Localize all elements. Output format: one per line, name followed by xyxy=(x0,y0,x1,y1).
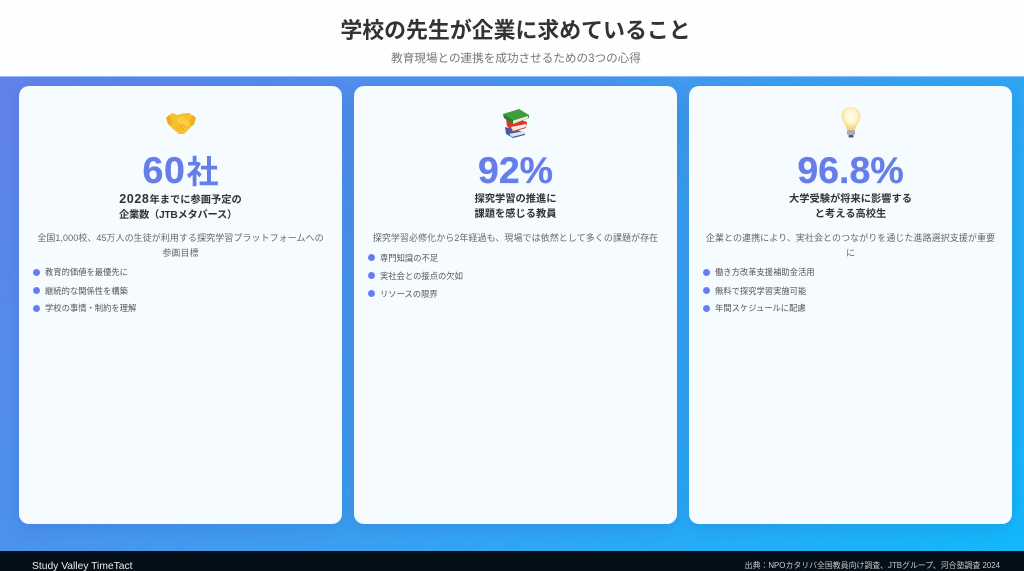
icon: light bulb xyxy=(842,107,860,138)
title: 学校の先生が企業に求めていること xyxy=(340,18,691,43)
stat label: 企業数（JTBメタバース） xyxy=(119,210,237,221)
bullet: 継続的な関係性を構築 xyxy=(45,286,128,296)
description: 企業との連携により、実社会とのつながりを通じた進路選択支援が重要に xyxy=(706,233,995,258)
icon: handshake xyxy=(166,113,196,134)
stat label xyxy=(119,192,242,221)
stat: 60社: 60社 xyxy=(143,149,218,191)
stat label: 探究学習の推進に xyxy=(474,194,556,205)
stat: 96.8%: 96.8% xyxy=(797,149,904,191)
bullet list xyxy=(368,252,463,298)
bullet: 働き方改革支援補助金活用 xyxy=(715,267,815,277)
subtitle: 教育現場との連携を成功させるための3つの心得 xyxy=(391,52,641,65)
footer xyxy=(0,551,1024,571)
source note: 出典：NPOカタリバ全国教員向け調査、JTBグループ、河合塾調査 2024 xyxy=(745,561,1000,570)
bullet: リソースの限界 xyxy=(380,288,438,298)
stat: 92%: 92% xyxy=(478,149,553,191)
bullet: 教育的価値を最優先に xyxy=(45,267,128,277)
bullet: 専門知識の不足 xyxy=(380,252,438,262)
header xyxy=(0,0,1024,77)
panel: 92 percent xyxy=(354,86,677,524)
stat label: 大学受験が将来に影響する xyxy=(789,194,912,205)
stat label: 2028年までに参画予定の xyxy=(119,192,242,206)
icon: books xyxy=(503,109,529,138)
stat label: と考える高校生 xyxy=(815,209,886,220)
bullet list xyxy=(703,267,815,313)
panel: 96.8 percent xyxy=(689,86,1012,524)
stat label: 課題を感じる教員 xyxy=(474,209,556,220)
bullet: 無料で探究学習実施可能 xyxy=(715,286,806,296)
panel: 60 companies xyxy=(19,86,342,524)
stat label xyxy=(789,192,912,220)
bullet: 学校の事情・制約を理解 xyxy=(45,303,136,313)
bullet list xyxy=(33,267,136,313)
description: 探究学習必修化から2年経過も、現場では依然として多くの課題が存在 xyxy=(373,233,658,243)
description: 全国1,000校、45万人の生徒が利用する探究学習プラットフォームへの参画目標 xyxy=(37,233,324,258)
bullet: 年間スケジュールに配慮 xyxy=(715,303,806,313)
bullet: 実社会との接点の欠如 xyxy=(380,270,463,280)
stat label xyxy=(474,193,556,220)
